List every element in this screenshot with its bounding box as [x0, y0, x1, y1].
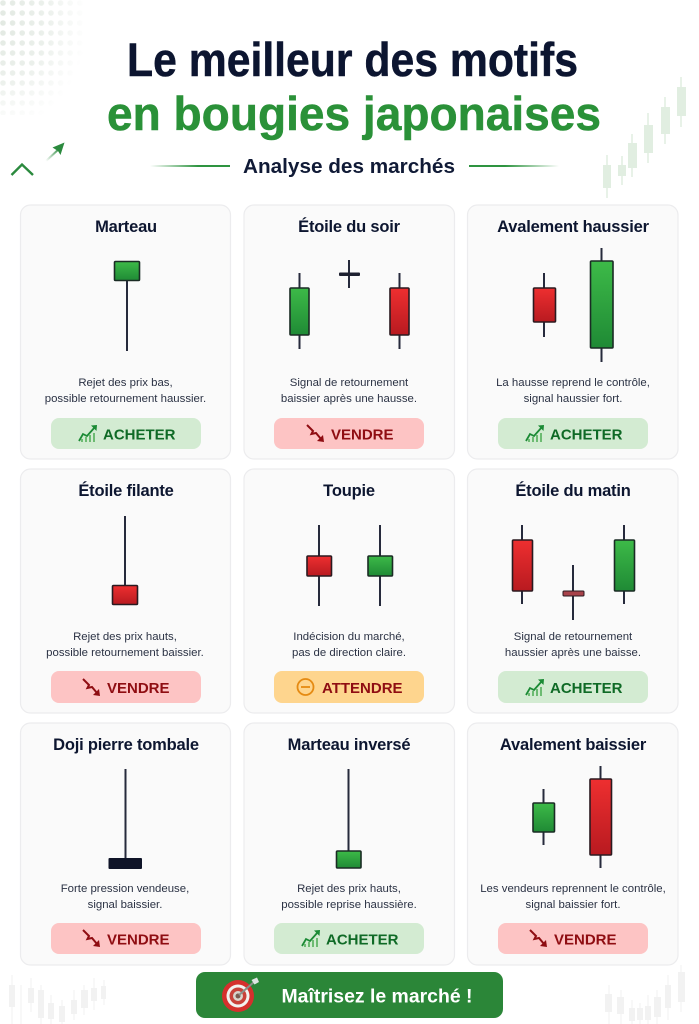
badge: acheter: ACHETER	[103, 426, 176, 444]
background candles: bottom right	[605, 965, 685, 1024]
description	[45, 377, 206, 405]
heading: Avalement haussier: Avalement haussier	[497, 218, 650, 236]
candle: inverted hammer	[336, 769, 361, 868]
description: haussier après une baisse.	[505, 647, 641, 659]
candles: bullish engulfing	[534, 248, 613, 362]
title	[107, 33, 601, 140]
heading: Toupie: Toupie	[323, 482, 375, 500]
background candles: top right	[603, 77, 686, 198]
heading: Doji pierre tombale: Doji pierre tombale	[53, 736, 199, 754]
badge: acheter	[274, 923, 424, 954]
description	[281, 377, 417, 405]
panel: Doji pierre tombale	[20, 723, 230, 965]
heading: Marteau inversé: Marteau inversé	[288, 736, 410, 754]
description	[292, 631, 406, 659]
description: Rejet des prix hauts,	[73, 631, 177, 643]
heading: Marteau: Marteau	[95, 218, 157, 236]
panel: Étoile du matin	[468, 469, 678, 713]
description: possible retournement baissier.	[46, 647, 204, 659]
badge: acheter	[498, 671, 648, 703]
badge: vendre	[51, 923, 201, 954]
icon: target with arrow	[222, 978, 259, 1012]
badge: vendre	[51, 671, 201, 703]
call to action button	[196, 972, 503, 1018]
description	[480, 883, 666, 911]
subtitle: Analyse des marchés	[243, 155, 455, 178]
badge: acheter: ACHETER	[326, 932, 399, 948]
candles: evening star	[290, 260, 409, 349]
description: signal baissier fort.	[526, 899, 620, 911]
badge: attendre	[274, 671, 424, 703]
description: Les vendeurs reprennent le contrôle,	[480, 883, 666, 895]
candle: shooting star	[112, 516, 138, 605]
panel: Marteau	[20, 205, 230, 459]
title: en bougies japonaises	[107, 87, 601, 140]
description	[281, 883, 417, 911]
heading: Étoile filante: Étoile filante	[78, 481, 174, 500]
heading: Avalement baissier: Avalement baissier	[500, 736, 647, 754]
badge: vendre: VENDRE	[554, 932, 617, 948]
description	[496, 377, 650, 405]
candles: morning star	[512, 525, 634, 620]
description	[61, 883, 189, 911]
badge: vendre: VENDRE	[331, 426, 394, 444]
description: pas de direction claire.	[292, 647, 406, 659]
title: Le meilleur des motifs	[127, 33, 578, 86]
description: Rejet des prix bas,	[78, 377, 173, 389]
description: signal baissier.	[88, 899, 162, 911]
badge: acheter	[51, 418, 201, 449]
candle: gravestone doji	[108, 769, 142, 869]
candle: hammer	[114, 262, 140, 351]
badge: vendre: VENDRE	[107, 932, 170, 948]
badge: acheter	[498, 418, 648, 449]
description: Signal de retournement	[514, 631, 633, 643]
badge: vendre	[274, 418, 424, 449]
panel: Toupie	[244, 469, 454, 713]
icon: rising arrow	[46, 142, 64, 161]
panel: Avalement baissier	[468, 723, 678, 965]
description: La hausse reprend le contrôle,	[496, 377, 650, 389]
candles: bearish engulfing	[533, 766, 612, 868]
description	[505, 631, 641, 659]
description: Signal de retournement	[290, 377, 409, 389]
description: possible retournement haussier.	[45, 393, 206, 405]
description	[46, 631, 204, 659]
badge: vendre: VENDRE	[107, 680, 170, 697]
call to action button: Maîtrisez le marché !	[282, 986, 472, 1008]
badge: attendre: ATTENDRE	[322, 680, 403, 697]
badge: acheter: ACHETER	[550, 680, 623, 697]
panel: Étoile filante	[20, 469, 230, 713]
badge: acheter: ACHETER	[550, 426, 623, 444]
heading: Étoile du soir: Étoile du soir	[298, 217, 401, 236]
icon: small chevron	[12, 164, 33, 175]
description: Forte pression vendeuse,	[61, 883, 189, 895]
background candles: bottom left	[9, 975, 106, 1024]
description: baissier après une hausse.	[281, 393, 417, 405]
candles: spinning tops	[307, 525, 392, 606]
description: possible reprise haussière.	[281, 899, 417, 911]
panel: Avalement haussier	[468, 205, 678, 459]
background dot pattern	[0, 0, 70, 106]
description: Rejet des prix hauts,	[297, 883, 401, 895]
panel: Étoile du soir	[244, 205, 454, 459]
description: Indécision du marché,	[293, 631, 405, 643]
badge: vendre	[498, 923, 648, 954]
panel: Marteau inversé	[244, 723, 454, 965]
heading: Étoile du matin: Étoile du matin	[515, 481, 631, 500]
description: signal haussier fort.	[524, 393, 622, 405]
